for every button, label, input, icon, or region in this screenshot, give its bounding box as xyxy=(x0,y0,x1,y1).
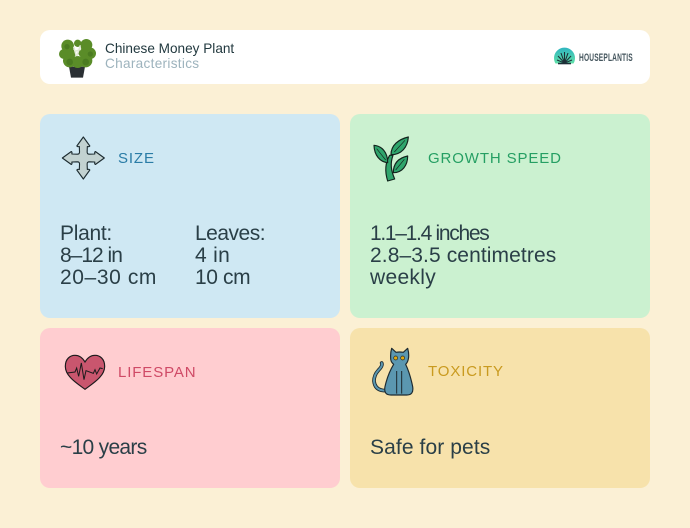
text: plant dimensions: 8–12 in xyxy=(60,244,122,267)
icon: cat xyxy=(372,348,414,396)
header bar xyxy=(40,30,650,84)
text: growth rate: 2.8–3.5 centimetres xyxy=(370,244,556,267)
text: leaf dimensions xyxy=(195,222,265,289)
heading: growth speed: GROWTH SPEED xyxy=(428,150,562,167)
icon: four-way arrows xyxy=(62,136,105,180)
heading: lifespan: LIFESPAN xyxy=(118,364,196,381)
text: plant dimensions xyxy=(60,222,157,289)
subtitle: Characteristics xyxy=(105,56,199,71)
text: growth rate: 1.1–1.4 inches xyxy=(370,222,488,245)
logo: Houseplantis xyxy=(554,48,633,64)
heading: toxicity: TOXICITY xyxy=(428,363,504,380)
icon: potted money plant xyxy=(59,39,96,78)
title: Chinese Money Plant xyxy=(105,41,234,56)
text: plant dimensions: Plant: xyxy=(60,222,112,245)
text: leaf dimensions: Leaves: xyxy=(195,222,265,245)
text: leaf dimensions: 4 in xyxy=(195,244,230,267)
panel: lifespan xyxy=(40,328,340,488)
heading: size: SIZE xyxy=(118,150,155,167)
logo mark xyxy=(554,48,575,64)
icon: leaves sprout xyxy=(373,136,409,182)
icon: heart with pulse xyxy=(64,354,106,390)
panel: growth speed xyxy=(350,114,650,318)
text: plant dimensions: 20–30 cm xyxy=(60,266,157,289)
text: growth rate: weekly xyxy=(370,266,436,289)
text: lifespan value: ~10 years xyxy=(60,436,147,459)
logo wordmark: HOUSEPLANTIS xyxy=(579,52,633,64)
panel: toxicity xyxy=(350,328,650,488)
panel: size xyxy=(40,114,340,318)
text: leaf dimensions: 10 cm xyxy=(195,266,250,289)
text: toxicity value: Safe for pets xyxy=(370,436,490,459)
text: growth rate xyxy=(370,222,556,289)
